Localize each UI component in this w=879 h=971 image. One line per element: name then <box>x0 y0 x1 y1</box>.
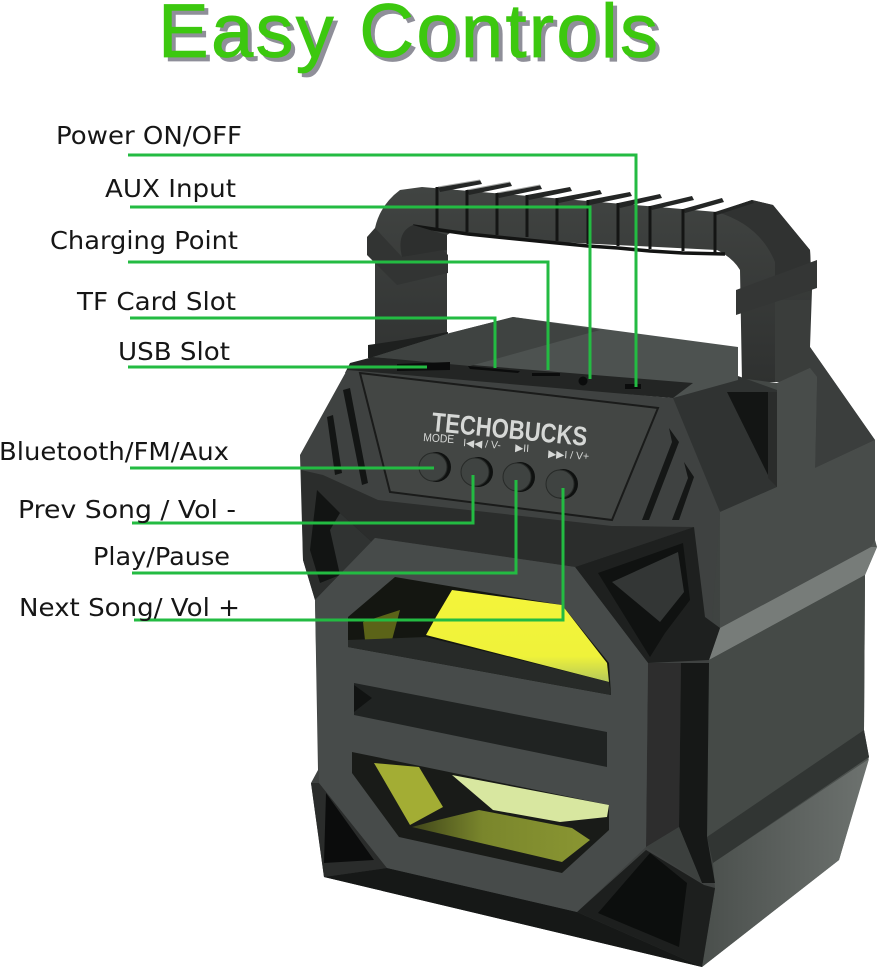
bottom right corner <box>577 850 715 967</box>
button labels: ▶II <box>515 442 530 455</box>
bottom left corner <box>311 783 387 877</box>
control panel <box>360 373 658 520</box>
speaker illustration <box>300 180 877 967</box>
button labels <box>423 432 589 463</box>
line: tf card <box>130 318 495 368</box>
front of body <box>300 370 720 967</box>
button labels: I◀◀ / V- <box>463 437 502 452</box>
top plate <box>345 317 738 398</box>
label: prev: Prev Song / Vol - <box>18 495 236 524</box>
callout lines <box>128 155 636 620</box>
upper right corner <box>575 527 720 663</box>
buttons <box>419 452 578 499</box>
line: play <box>132 480 516 573</box>
label: power: Power ON/OFF <box>56 121 242 150</box>
label: tf card: TF Card Slot <box>76 287 236 316</box>
brand name: TECHOBUCKS <box>430 407 589 452</box>
label: charging: Charging Point <box>50 226 238 255</box>
label: bluetooth: Bluetooth/FM/Aux <box>0 437 229 466</box>
line: prev <box>132 475 473 523</box>
dark band under panel <box>301 470 694 600</box>
middle slot <box>354 683 607 767</box>
right side of body <box>668 347 877 967</box>
line: bluetooth <box>130 466 434 470</box>
label: play: Play/Pause <box>93 542 230 571</box>
bottom edge <box>324 868 702 967</box>
lower speaker opening <box>352 752 609 873</box>
label: aux: AUX Input <box>105 174 236 203</box>
ports <box>397 362 641 389</box>
handle <box>367 180 817 382</box>
line: next <box>134 488 563 620</box>
line: power <box>128 155 636 387</box>
button labels: MODE <box>423 432 455 446</box>
label: next: Next Song/ Vol + <box>19 593 240 622</box>
light stripe <box>709 547 877 660</box>
button labels: ▶▶I / V+ <box>548 448 589 463</box>
line: usb <box>128 366 427 368</box>
upper speaker opening <box>348 577 611 695</box>
line: charging <box>128 262 548 370</box>
dark columns <box>646 663 681 847</box>
label: usb: USB Slot <box>118 337 230 366</box>
line: aux <box>130 207 590 379</box>
front grille frame <box>315 538 648 912</box>
